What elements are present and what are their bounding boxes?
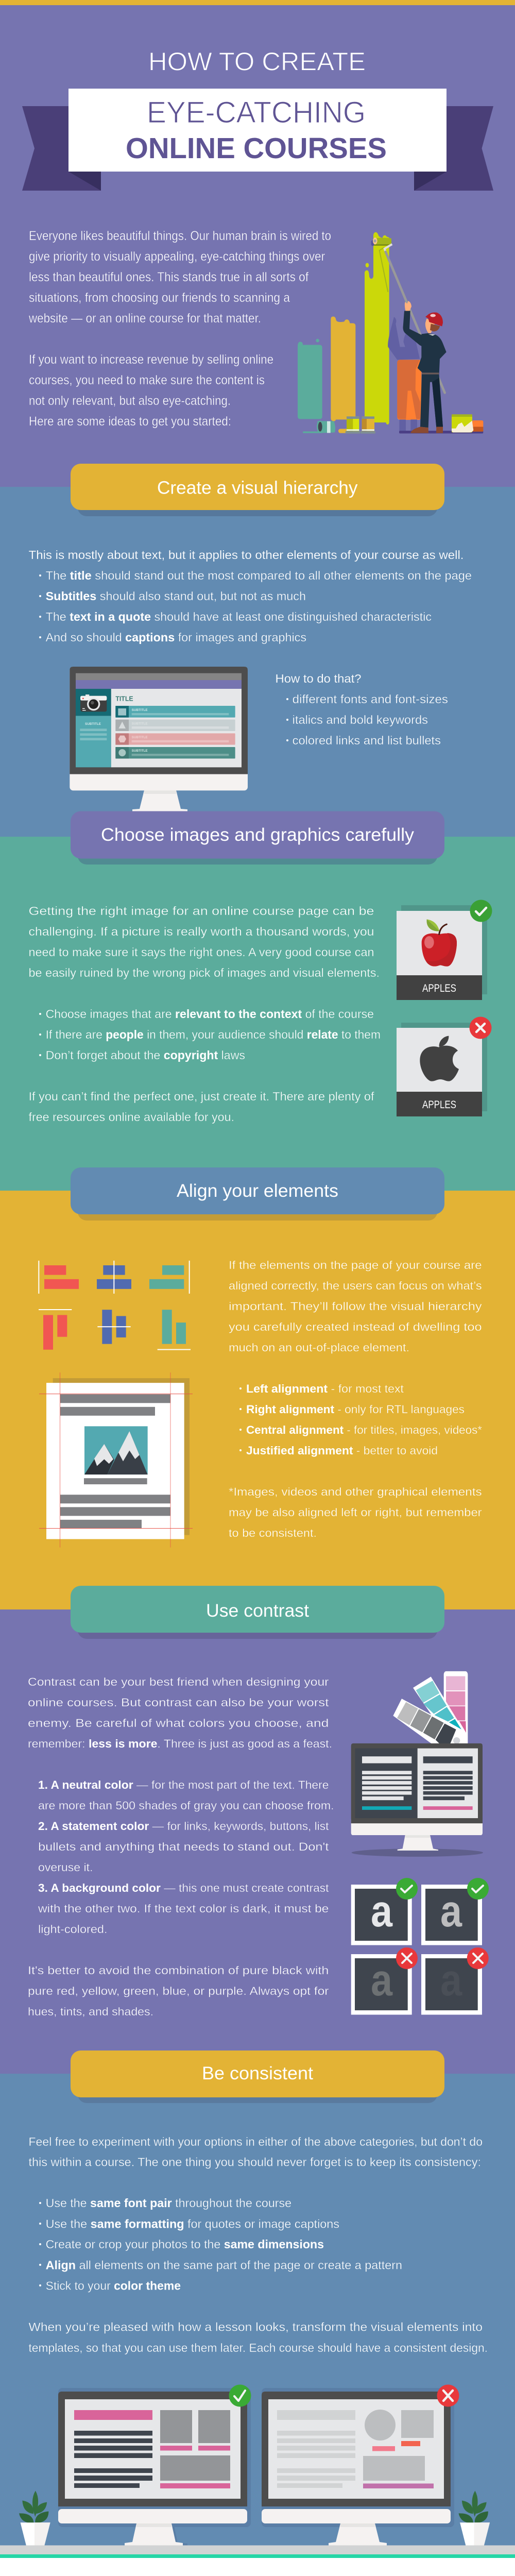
hierarchy text block: The text in a quote should have at least one distinguished characteristic [46, 610, 432, 623]
consistency text block: Create or crop your photos to the same dimensions [46, 2238, 324, 2251]
panel: align your elements [0, 1167, 515, 1609]
consistency text block: Stick to your color theme [46, 2279, 181, 2293]
title ribbon banner: EYE-CATCHING [147, 96, 366, 129]
section heading button: images: Choose images and graphics carefully [101, 825, 414, 845]
panel: intro [0, 0, 515, 487]
contrast text block [28, 1675, 334, 2018]
intro text block: courses, you need to make sure the content is [29, 373, 265, 387]
contrast example cards: a [371, 1886, 393, 1936]
title ribbon banner: ONLINE COURSES [126, 132, 387, 165]
contrast text block: enemy. Be careful of what colors you choose, and [28, 1717, 329, 1730]
section heading button: hierarchy: Create a visual hierarchy [157, 478, 358, 498]
hierarchy text block: The title should stand out the most compared to all other elements on the page [46, 569, 472, 582]
images text block: need to make sure it says the right ones. A very good course can [29, 945, 374, 959]
icon: green check badge [229, 2384, 251, 2407]
intro text block: If you want to increase revenue by selling online [29, 352, 273, 367]
card: wrong image, apple logo: APPLES [422, 1099, 456, 1111]
illustration: color swatches and contrast monitor [351, 1671, 483, 1857]
images text block: If you can’t find the perfect one, just create it. There are plenty of [29, 1090, 374, 1103]
contrast text block: online courses. But contrast can also be your worst [28, 1696, 329, 1709]
card: correct image, apple fruit: APPLES [422, 982, 456, 994]
how to do that text block: different fonts and font-sizes [293, 692, 448, 706]
images text block [29, 904, 381, 1124]
icon: red cross badge [437, 2384, 459, 2407]
panel: choose images and graphics carefully [0, 811, 515, 1191]
alignment text block: Right alignment - only for RTL languages [246, 1403, 465, 1416]
section heading button: align: Align your elements [177, 1181, 338, 1201]
hierarchy text block: Subtitles should also stand out, but not as much [46, 589, 306, 603]
illustration: monitor showing course page: SUBTITLE [132, 736, 148, 739]
alignment text block: Left alignment - for most text [246, 1382, 404, 1395]
contrast text block: bullets and anything that needs to stand out. Don't [38, 1840, 329, 1853]
icon: red apple [422, 919, 457, 967]
how to do that text block: colored links and list bullets [293, 734, 441, 747]
alignment text block: important. They’ll follow the visual hierarchy [229, 1300, 482, 1313]
icon: right potted plant [458, 2490, 490, 2546]
consistency text block: Use the same font pair throughout the course [46, 2196, 291, 2210]
contrast text block: It's better to avoid the combination of pure black with [28, 1964, 329, 1977]
contrast text block: remember: less is more . Three is just as good as a feast. [28, 1737, 332, 1750]
panel: use contrast [0, 1586, 515, 2074]
alignment text block [229, 1259, 482, 1539]
alignment diagrams [38, 1261, 191, 1350]
illustration: monitor showing course page [70, 667, 248, 811]
section heading button: align [71, 1167, 444, 1221]
consistency text block: Use the same formatting for quotes or image captions [46, 2217, 339, 2231]
contrast example cards [351, 1878, 489, 2014]
alignment text block: may be also aligned left or right, but remember [229, 1506, 482, 1519]
icons: check and cross badges [396, 1878, 489, 1969]
contrast text block: Contrast can be your best friend when designing your [28, 1675, 329, 1688]
contrast text block: with the other two. If the text color is dark, it must be [38, 1902, 329, 1915]
alignment text block: much on an out-of-place element. [229, 1341, 409, 1354]
contrast text block: 3. A background color — this one must create contrast [38, 1882, 329, 1894]
consistency text block: this within a course. The one thing you should never forget is to keep its consistency: [29, 2156, 481, 2169]
title ribbon banner [22, 89, 493, 191]
illustration: consistent monitor [58, 2384, 251, 2546]
contrast text block: 1. A neutral color — for the most part of the text. There [38, 1778, 329, 1791]
how to do that text block: italics and bold keywords [293, 713, 428, 726]
hierarchy text block [29, 548, 472, 644]
images text block: Getting the right image for an online course page can be [29, 904, 374, 918]
panel: be consistent [0, 2050, 515, 2546]
alignment text block: Central alignment - for titles, images, videos* [246, 1423, 482, 1436]
alignment text block: If the elements on the page of your course are [229, 1259, 482, 1272]
panel: create a visual hierarchy [0, 464, 515, 837]
intro text block: give priority to visually appealing, eye-catching things over [29, 249, 325, 264]
hierarchy text block: This is mostly about text, but it applies to other elements of your course as well. [29, 548, 464, 562]
contrast example cards: a [440, 1886, 462, 1936]
images text block: Don’t forget about the copyright laws [46, 1048, 245, 1062]
intro text block: website — or an online course for that matter. [28, 311, 261, 326]
images text block: challenging. If a picture is really worth a thousand words, you [29, 925, 374, 938]
section heading button: consistent [71, 2050, 444, 2103]
contrast text block: overuse it. [38, 1861, 93, 1874]
illustration: monitor showing course page: SUBTITLE [132, 708, 148, 712]
section heading button: hierarchy [71, 464, 444, 516]
images text block: If there are people in them, your audience should relate to them [46, 1028, 381, 1041]
consistency text block: templates, so that you can use them later. Each course should have a consistent design. [29, 2341, 488, 2354]
how to do that text block: How to do that? [275, 672, 362, 685]
intro text block [28, 229, 331, 429]
icon: left potted plant [19, 2490, 50, 2546]
section heading button: images [71, 811, 444, 865]
document layout with guides [39, 1372, 193, 1548]
images text block: free resources online available for you. [29, 1110, 234, 1124]
contrast text block: hues, tints, and shades. [28, 2005, 153, 2018]
contrast example cards: a [440, 1955, 462, 2005]
card: correct image, apple fruit [397, 900, 492, 1000]
contrast text block: light-colored. [38, 1923, 107, 1936]
section heading button: contrast [71, 1586, 444, 1639]
alignment text block: you carefully created instead of dwelling too [229, 1320, 482, 1333]
intro text block: situations, from choosing our friends to scanning a [29, 291, 290, 305]
alignment text block: aligned correctly, the users can focus on what’s [229, 1279, 482, 1292]
images text block: Choose images that are relevant to the context of the course [46, 1007, 374, 1021]
icon: red cross badge [470, 1017, 491, 1039]
contrast text block: are more than 500 shades of gray you can choose from. [38, 1799, 334, 1812]
contrast text block: pure red, yellow, green, blue, or purple. Always opt for [28, 1985, 329, 1997]
intro text block: Here are some ideas to get you started: [29, 414, 231, 429]
icon: green check badge [470, 900, 492, 922]
consistency text block: Align all elements on the same part of the page or create a pattern [46, 2259, 402, 2272]
title: how to create: HOW TO CREATE [148, 47, 366, 76]
consistency text block [29, 2135, 488, 2354]
images text block: be easily ruined by the wrong pick of images and visual elements. [29, 966, 380, 979]
alignment text block: to be consistent. [229, 1527, 317, 1539]
intro text block: less than beautiful ones. This stands true in all sorts of [29, 270, 308, 284]
consistency text block: Feel free to experiment with your options in either of the above categories, but don’t do [29, 2135, 483, 2148]
contrast example cards: a [371, 1955, 393, 2005]
illustration: inconsistent monitor [262, 2384, 459, 2546]
consistency text block: When you’re pleased with how a lesson looks, transform the visual elements into [29, 2320, 483, 2334]
section heading button: consistent: Be consistent [202, 2063, 313, 2083]
card: wrong image, apple logo [397, 1017, 491, 1116]
how to do that text block [275, 672, 448, 747]
icon: apple logo [420, 1036, 459, 1081]
section heading button: contrast: Use contrast [206, 1601, 309, 1621]
panel: footer [0, 2545, 515, 2576]
contrast text block: 2. A statement color — for links, keywords, buttons, list [38, 1820, 329, 1833]
intro text block: not only relevant, but also eye-catching. [29, 394, 231, 408]
illustration: monitor showing course page: SUBTITLE [132, 749, 148, 753]
illustration: monitor showing course page: SUBTITLE [132, 722, 148, 725]
illustration: monitor showing course page: TITLE [115, 696, 133, 703]
alignment text block: Justified alignment - better to avoid [246, 1444, 438, 1457]
hierarchy text block: And so should captions for images and graphics [46, 631, 306, 644]
illustration: painter and paint bars [298, 232, 483, 434]
illustration: monitor showing course page: SUBTITLE [85, 722, 101, 726]
alignment text block: *Images, videos and other graphical elements [229, 1485, 482, 1498]
intro text block: Everyone likes beautiful things. Our human brain is wired to [29, 229, 331, 243]
